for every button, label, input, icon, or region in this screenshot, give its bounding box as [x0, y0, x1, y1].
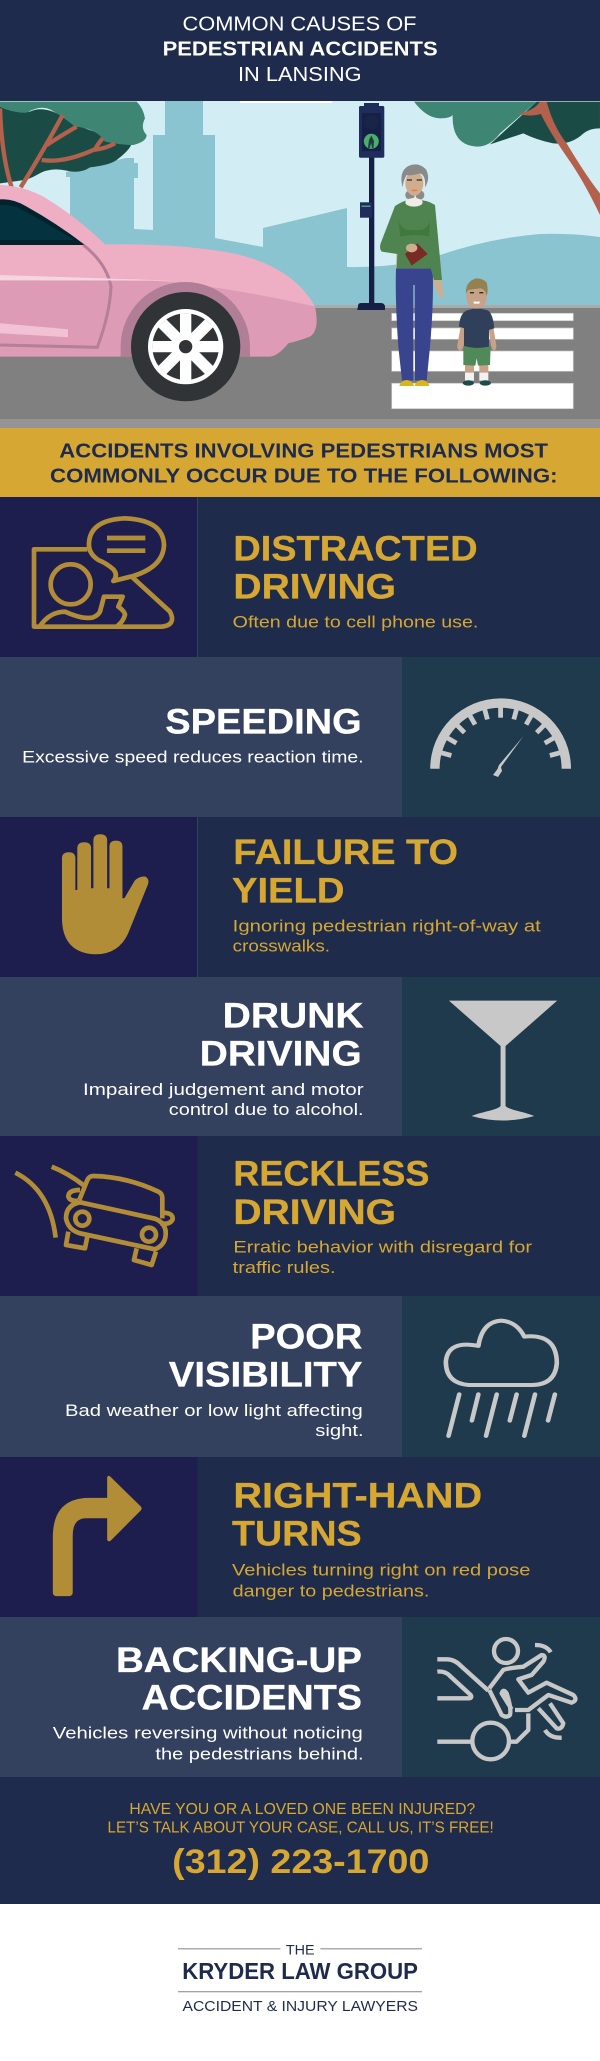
tree: right	[414, 102, 600, 215]
heading: FAILURE TO	[233, 833, 458, 872]
description: Often due to cell phone use.	[233, 613, 478, 632]
woman pedestrian	[380, 164, 443, 386]
panel: reckless driving	[0, 1136, 600, 1296]
heading: ACCIDENTS	[142, 1678, 362, 1718]
heading: RECKLESS	[233, 1155, 429, 1194]
description	[83, 1080, 364, 1119]
panel: failure to yield	[0, 817, 600, 977]
car	[0, 185, 317, 401]
heading: VISIBILITY	[169, 1356, 362, 1395]
heading	[200, 996, 364, 1074]
description: Ignoring pedestrian right-of-way at	[233, 917, 541, 936]
heading: RIGHT-HAND	[233, 1477, 482, 1516]
icon: right turn arrow	[53, 1476, 142, 1596]
banner text	[50, 441, 558, 488]
heading	[169, 1317, 362, 1395]
heading: DRUNK	[223, 996, 364, 1035]
description: Bad weather or low light affecting	[65, 1401, 363, 1420]
panel: right-hand turns	[0, 1457, 600, 1617]
heading	[232, 833, 458, 911]
city skyline	[66, 101, 600, 307]
description: Vehicles reversing without noticing	[53, 1723, 363, 1742]
description	[232, 1560, 530, 1600]
description: sight.	[315, 1421, 364, 1440]
icon: pedestrian struck by car	[437, 1639, 575, 1759]
panel: distracted driving	[0, 497, 600, 657]
banner	[0, 428, 600, 497]
title: COMMON CAUSES OF	[182, 14, 416, 36]
banner text: COMMONLY OCCUR DUE TO THE FOLLOWING:	[50, 466, 558, 488]
logo: THE	[286, 1942, 315, 1957]
panel: drunk driving	[0, 977, 600, 1136]
panel: poor visibility	[0, 1296, 600, 1457]
call-to-action text	[108, 1801, 494, 1837]
logo: KRYDER LAW GROUP	[182, 1958, 418, 1984]
icon: swerving car	[15, 1167, 173, 1265]
description	[233, 1237, 532, 1277]
header panel	[0, 0, 600, 101]
banner text: ACCIDENTS INVOLVING PEDESTRIANS MOST	[59, 441, 548, 463]
logo	[178, 1942, 422, 2015]
icon: phone distraction	[34, 518, 172, 627]
traffic light	[357, 103, 385, 310]
description: Erratic behavior with disregard for	[233, 1237, 532, 1256]
heading: YIELD	[232, 872, 344, 911]
icon: speedometer	[430, 698, 571, 777]
heading	[116, 1641, 362, 1718]
heading: DISTRACTED	[233, 530, 478, 569]
icon: martini glass	[449, 1001, 557, 1120]
heading	[233, 1155, 429, 1232]
wheel	[131, 292, 240, 401]
heading: TURNS	[232, 1514, 362, 1554]
heading: SPEEDING	[165, 702, 362, 741]
description: Vehicles turning right on red pose	[232, 1560, 530, 1580]
heading: BACKING-UP	[116, 1641, 362, 1680]
heading: POOR	[250, 1317, 362, 1356]
panel: speeding	[0, 657, 600, 817]
description: Impaired judgement and motor	[83, 1080, 364, 1099]
call to action	[0, 1777, 600, 1904]
description	[233, 917, 541, 956]
tree: left	[0, 102, 147, 187]
heading	[232, 1477, 482, 1554]
child pedestrian	[457, 278, 496, 386]
illustration: street scene	[0, 101, 600, 428]
call-to-action text: LET’S TALK ABOUT YOUR CASE, CALL US, IT’S FREE!	[108, 1820, 494, 1837]
description: control due to alcohol.	[169, 1100, 364, 1119]
description: crosswalks.	[233, 937, 330, 956]
heading: DRIVING	[200, 1035, 362, 1074]
crosswalk	[392, 313, 573, 409]
title: IN LANSING	[238, 64, 362, 86]
description	[53, 1723, 364, 1763]
road	[0, 305, 600, 428]
title	[163, 14, 438, 86]
description	[65, 1401, 364, 1440]
call-to-action text: HAVE YOU OR A LOVED ONE BEEN INJURED?	[129, 1801, 476, 1818]
description: traffic rules.	[233, 1258, 336, 1277]
heading: DRIVING	[233, 567, 396, 606]
logo: ACCIDENT & INJURY LAWYERS	[182, 1998, 418, 2015]
icon: raised hand	[62, 834, 148, 954]
description: the pedestrians behind.	[155, 1744, 364, 1763]
heading	[233, 530, 478, 606]
title: PEDESTRIAN ACCIDENTS	[163, 39, 438, 61]
phone number: (312) 223-1700	[172, 1843, 429, 1881]
description: danger to pedestrians.	[233, 1582, 429, 1600]
icon: rain cloud	[446, 1321, 557, 1436]
heading: DRIVING	[233, 1193, 396, 1232]
description: Excessive speed reduces reaction time.	[22, 748, 364, 767]
panel: backing-up accidents	[0, 1617, 600, 1777]
